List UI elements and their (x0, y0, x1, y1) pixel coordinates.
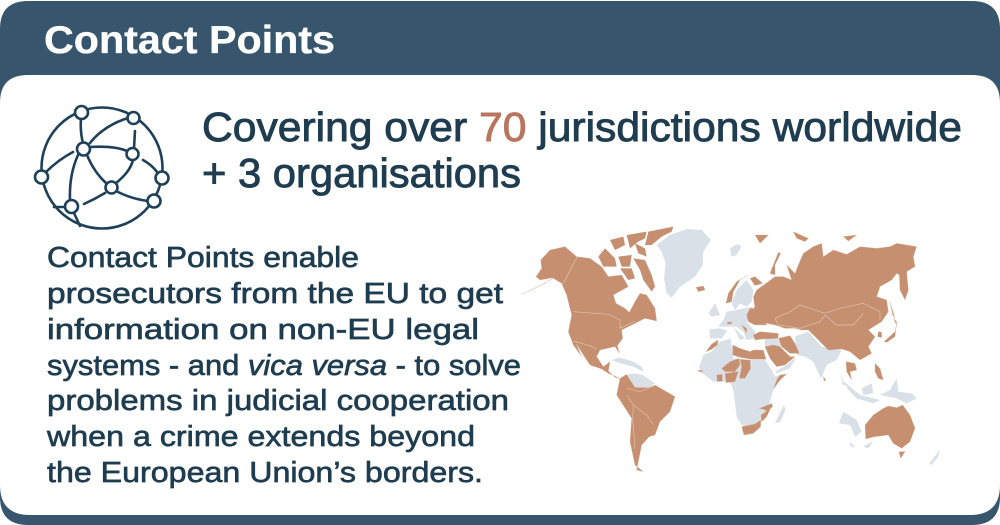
heading: + 3 organisations (202, 150, 521, 196)
text block: description: the European Union’s borders. (47, 457, 483, 489)
map: Canadian Arctic islands (598, 227, 673, 292)
text block: description: problems in judicial cooperation (47, 385, 509, 417)
map: Asia and Oceania (747, 232, 940, 465)
text block: description: Contact Points enable (47, 242, 359, 274)
title: Contact Points (44, 19, 335, 62)
heading: Covering over 70 jurisdictions worldwide (202, 104, 962, 150)
text block: description: information on non-EU legal (47, 314, 479, 346)
text block: description: prosecutors from the EU to get (47, 278, 503, 310)
text block: description (46, 242, 521, 489)
text block: description: systems - and vica versa - to solve (47, 350, 521, 382)
icon: network globe (35, 106, 168, 228)
heading (202, 104, 962, 196)
world map (522, 227, 940, 472)
map: Europe and Africa (696, 275, 787, 435)
map: Americas (522, 229, 742, 472)
text block: description: when a crime extends beyond (46, 421, 475, 453)
